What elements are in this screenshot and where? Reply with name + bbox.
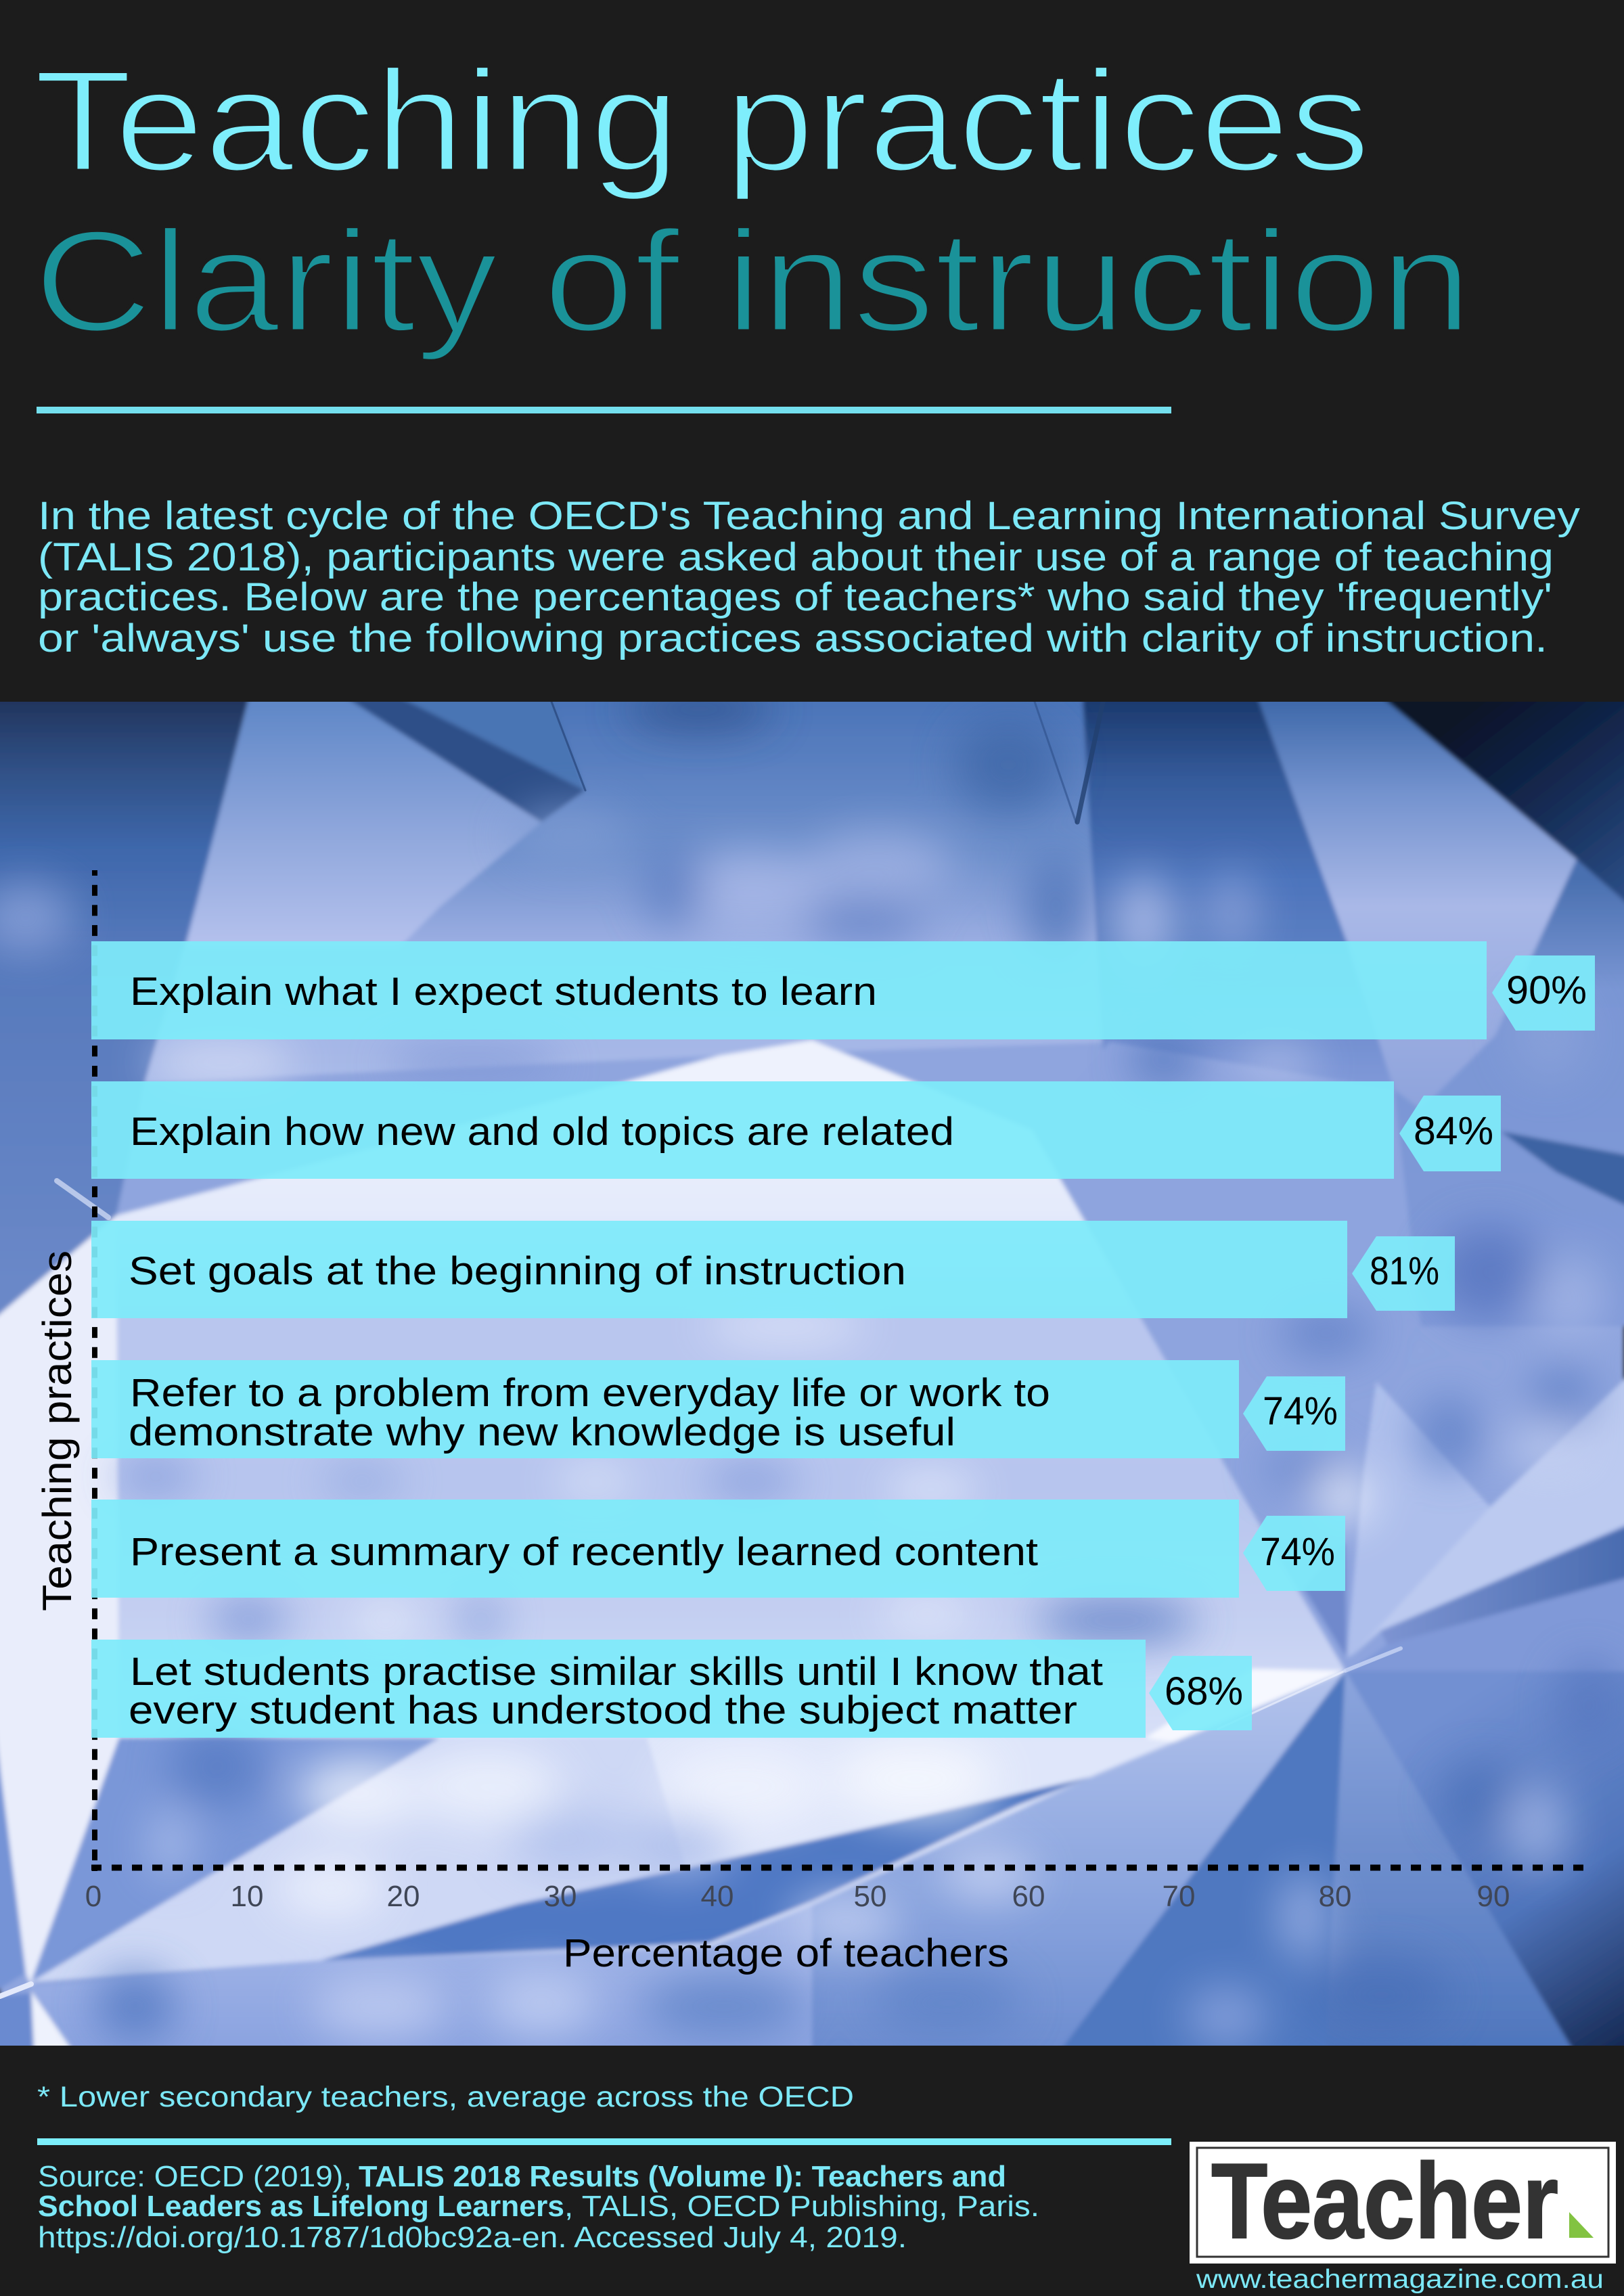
bar 5: 74% (91, 1500, 1345, 1598)
footnote: * Lower secondary teachers, average across the OECD (37, 2081, 854, 2113)
x axis tick labels: 50 (854, 1880, 886, 1913)
intro paragraph: practices. Below are the percentages of teachers* who said they 'frequently' (38, 575, 1552, 619)
y axis title: Teaching practices (35, 1251, 80, 1611)
x axis title: Percentage of teachers (563, 1931, 1009, 1975)
facets (0, 697, 1624, 2050)
y axis dashed line (92, 870, 97, 1871)
title rule (37, 407, 1171, 413)
facet edges (0, 702, 1401, 1996)
bar 4: 74% (91, 1360, 1345, 1458)
bar 1: 90% (91, 941, 1595, 1039)
bar 3: 81% (91, 1221, 1455, 1318)
x axis tick labels: 0 (85, 1880, 102, 1913)
x axis dashed line (91, 1865, 1583, 1870)
title line 1: Teaching practices (34, 41, 1370, 202)
x axis tick labels: 90 (1477, 1880, 1510, 1913)
x axis tick labels: 70 (1163, 1880, 1195, 1913)
bar 6: 68% (91, 1640, 1252, 1738)
bar 4: 74%: demonstrate why new knowledge is useful (129, 1410, 955, 1454)
bar 1: 90%: 90% (1506, 968, 1587, 1012)
bar 3: 81%: Set goals at the beginning of instruction (129, 1249, 906, 1293)
intro paragraph (38, 494, 1580, 660)
intro paragraph: or 'always' use the following practices associated with clarity of instruction. (38, 616, 1548, 660)
title (34, 41, 1472, 362)
bar 1: 90%: Explain what I expect students to learn (130, 970, 877, 1014)
header panel (0, 0, 1624, 702)
bar 4: 74%: Refer to a problem from everyday life or work to (130, 1371, 1050, 1415)
bar 2: 84%: 84% (1414, 1109, 1493, 1153)
source text: School Leaders as Lifelong Learners (38, 2190, 564, 2223)
x axis tick labels: 30 (544, 1880, 577, 1913)
footer rule (37, 2138, 1171, 2145)
intro paragraph: (TALIS 2018), participants were asked about their use of a range of teaching (38, 535, 1554, 579)
bar 6: 68%: 68% (1165, 1669, 1243, 1713)
source text: https://doi.org/10.1787/1d0bc92a-en. Accessed July 4, 2019. (38, 2221, 907, 2254)
x axis tick labels (85, 1880, 1510, 1913)
x axis tick labels: 60 (1012, 1880, 1045, 1913)
x axis tick labels: 80 (1319, 1880, 1351, 1913)
chart (35, 870, 1595, 1975)
source text: Source: OECD (2019), (38, 2160, 352, 2193)
bar 3: 81%: 81% (1370, 1249, 1439, 1293)
bar 4: 74%: 74% (1263, 1389, 1338, 1433)
source text: TALIS 2018 Results (Volume I): Teachers and (359, 2160, 1006, 2193)
x axis tick labels: 10 (231, 1880, 263, 1913)
footer panel (0, 2046, 1624, 2296)
logo: Teacher: Teacher (1211, 2142, 1558, 2261)
soft light patches (0, 689, 1619, 2047)
website url: www.teachermagazine.com.au (1196, 2265, 1604, 2294)
bar 2: 84% (91, 1081, 1501, 1179)
bar 2: 84%: Explain how new and old topics are related (130, 1110, 954, 1154)
bar 5: 74%: 74% (1260, 1530, 1335, 1574)
bar 6: 68%: every student has understood the subject matter (129, 1688, 1077, 1732)
x axis tick labels: 40 (701, 1880, 734, 1913)
photo panel: blue crystal facets (0, 689, 1624, 2050)
x axis tick labels: 20 (387, 1880, 420, 1913)
intro paragraph: In the latest cycle of the OECD's Teaching and Learning International Survey (38, 494, 1580, 538)
title line 2: Clarity of instruction (34, 201, 1472, 362)
source text: , TALIS, OECD Publishing, Paris. (564, 2190, 1039, 2223)
bar 5: 74%: Present a summary of recently learned content (130, 1530, 1038, 1574)
bar 6: 68%: Let students practise similar skills until I know that (130, 1650, 1103, 1694)
source text (38, 2160, 1039, 2254)
